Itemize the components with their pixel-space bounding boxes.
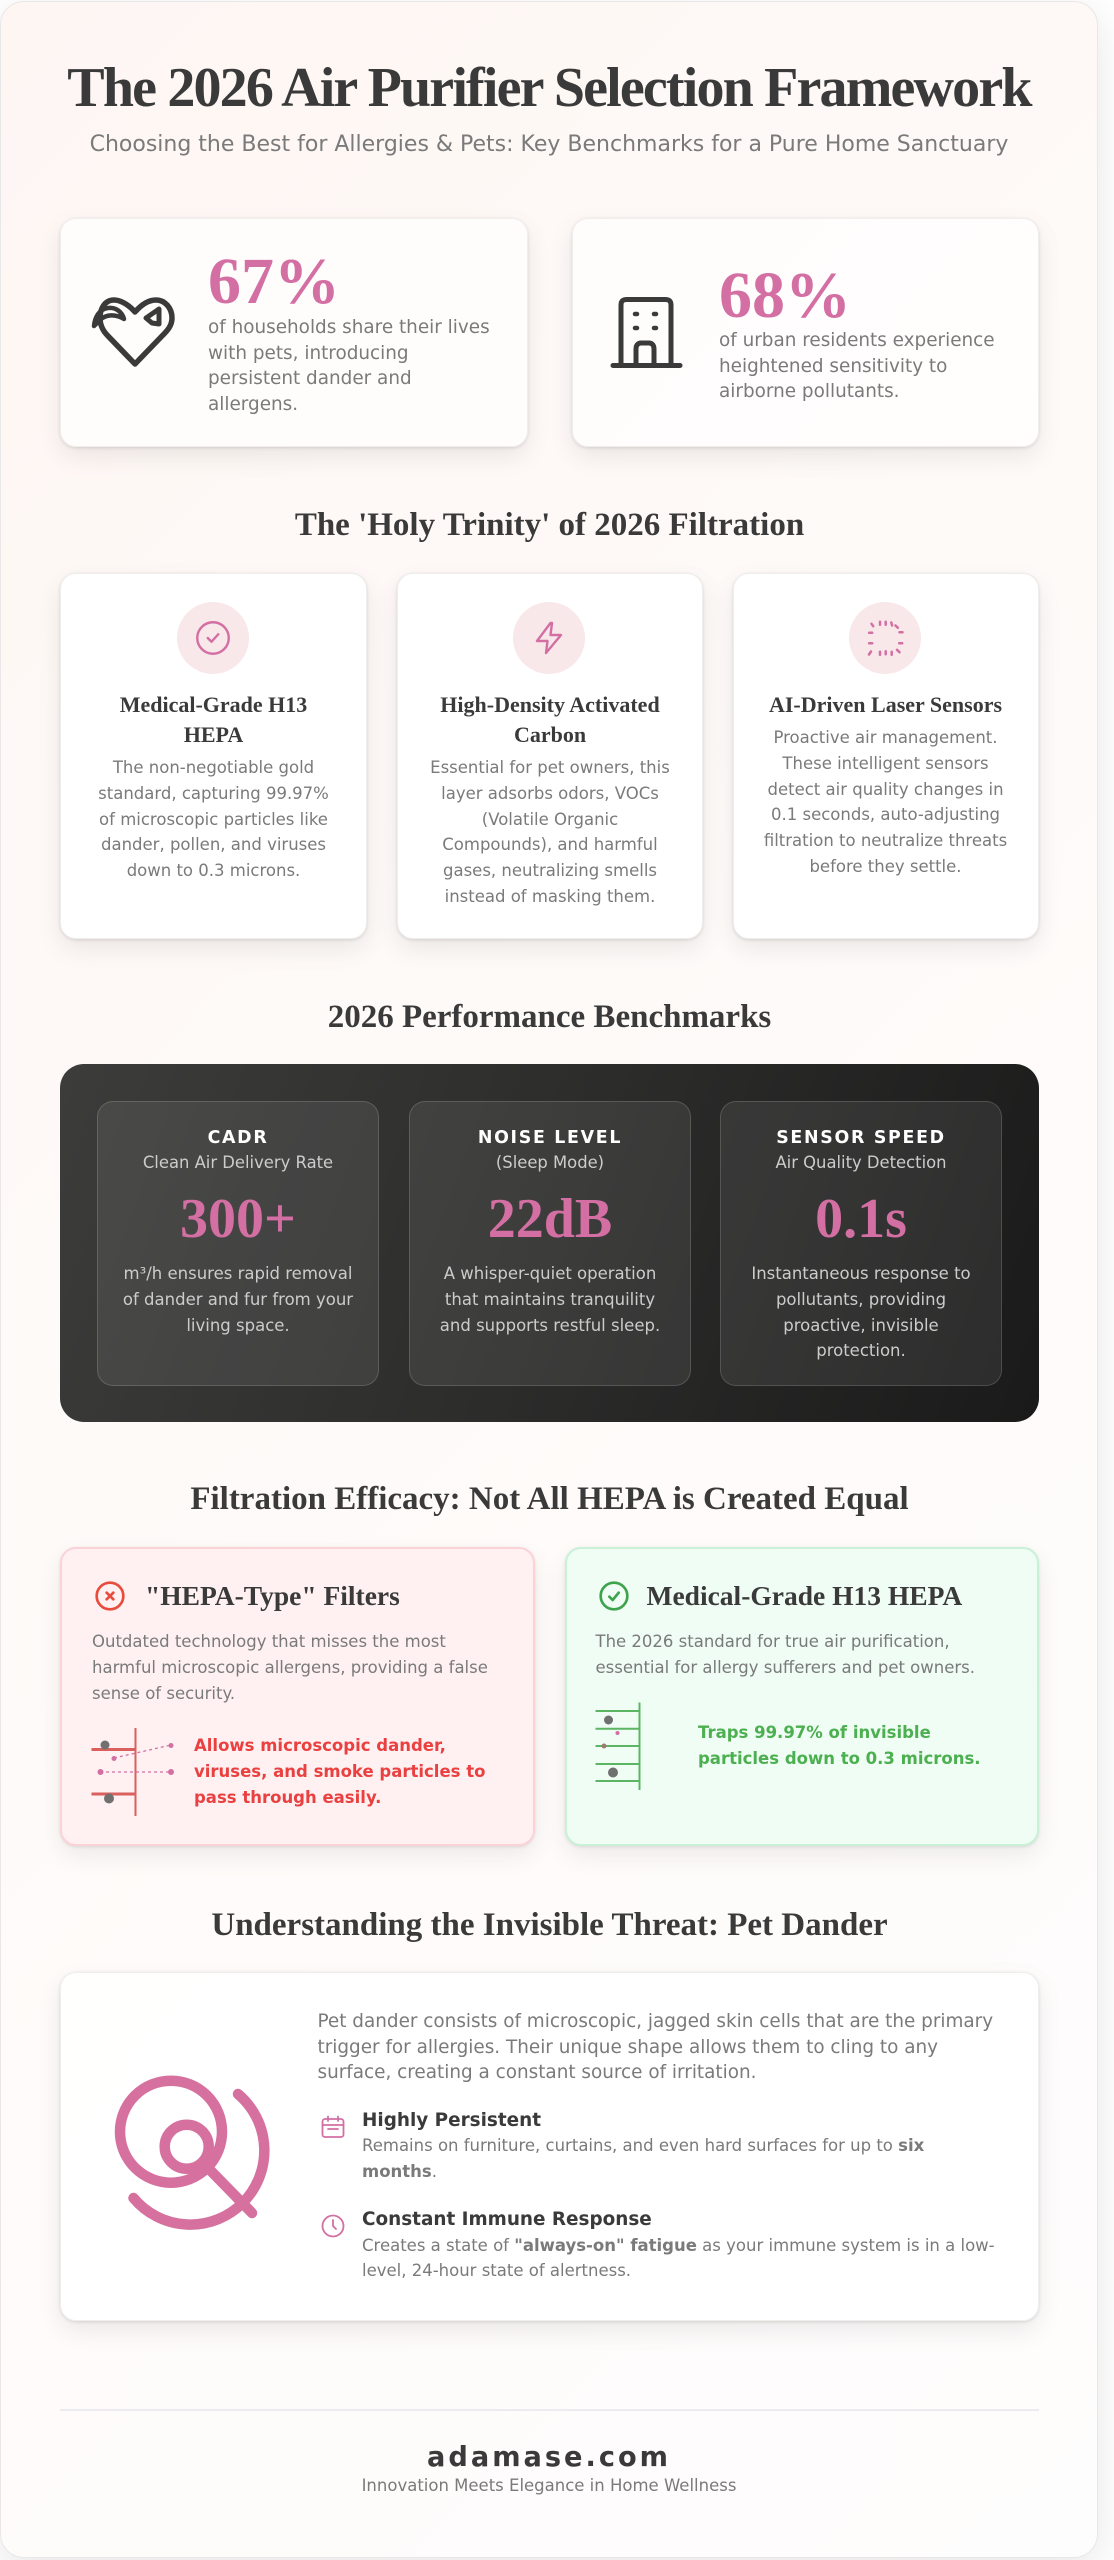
icon: check badge [177,602,249,674]
footer brand: adamase.com [427,2442,671,2473]
description: protection. [816,1341,906,1360]
icon: clock [322,2214,344,2238]
description: that maintains tranquility [445,1290,655,1309]
card title: HEPA [184,722,243,746]
stat: 68%: 68% [719,259,851,332]
stat description: of households share their lives [208,317,490,338]
intro text: trigger for allergies. Their unique shape allows them to cling to any [318,2037,938,2058]
card text: instead of masking them. [445,887,655,906]
description [751,1264,971,1360]
value: 300+ [180,1188,296,1250]
diagram: particles trapped [596,1702,640,1790]
label: SENSOR SPEED [776,1128,946,1148]
callout: allows particles [194,1736,485,1807]
callout: traps particles [698,1723,981,1768]
stat description: of urban residents experience [719,330,995,351]
callout: allows particles: viruses, and smoke particles to [194,1762,485,1781]
panel: AI laser sensors [733,573,1039,939]
card text: essential for allergy sufferers and pet owners. [596,1658,975,1677]
feature text: level, 24-hour state of alertness. [362,2261,631,2280]
card text: The 2026 standard for true air purification, [596,1632,950,1651]
description: m³/h ensures rapid removal [124,1264,352,1283]
value: 22dB [488,1188,612,1250]
description: of dander and fur from your [123,1290,353,1309]
description [123,1264,353,1335]
card text: gases, neutralizing smells [443,861,657,880]
card text: The non-negotiable gold [113,758,314,777]
stat description: airborne pollutants. [719,381,900,402]
card title: Medical-Grade H13 HEPA [646,1580,962,1611]
panel: stat households with pets [60,218,528,447]
footer tagline: Innovation Meets Elegance in Home Wellness [362,2476,736,2495]
feature text [362,2136,924,2181]
icon: lightning [513,602,585,674]
icon: building [610,297,682,368]
card text: 0.1 seconds, auto-adjusting [771,805,1000,824]
icon: x circle [95,1581,125,1611]
sublabel: (Sleep Mode) [496,1153,604,1172]
feature text [362,2236,995,2280]
sublabel: Clean Air Delivery Rate [143,1153,333,1172]
title: The 2026 Air Purifier Selection Framework [67,57,1031,119]
benchmark: CADR [97,1101,379,1386]
card text: before they settle. [809,857,962,876]
card title: Carbon [514,722,586,746]
icon: check circle [599,1581,629,1611]
value: 0.1s [815,1188,907,1250]
card text: filtration to neutralize threats [764,831,1007,850]
heading: filtration efficacy: Filtration Efficacy: Not All HEPA is Created Equal [190,1481,909,1517]
feature title: Highly Persistent [362,2110,541,2131]
label: NOISE LEVEL [478,1128,622,1148]
card text [764,728,1007,876]
intro text [318,2011,993,2083]
description: living space. [186,1316,290,1335]
icon: pet heart [92,297,175,367]
stat description: with pets, introducing [208,343,409,364]
icon: calendar [322,2116,344,2138]
heading: pet dander: Understanding the Invisible Threat: Pet Dander [211,1907,888,1943]
callout: traps particles: Traps 99.97% of invisible [698,1723,931,1742]
description: Instantaneous response to [751,1264,971,1283]
footer divider [60,2409,1039,2411]
intro text: surface, creating a constant source of irritation. [318,2062,756,2083]
card text [595,1632,975,1677]
label: CADR [208,1128,268,1148]
panel: HEPA-type [60,1547,534,1846]
description [440,1264,660,1335]
card text [98,758,329,880]
card text: harmful microscopic allergens, providing a false [92,1658,488,1677]
description: pollutants, providing [776,1290,946,1309]
benchmark: noise level [409,1101,691,1386]
card text: Essential for pet owners, this [430,758,670,777]
stat: 67%: 67% [208,245,340,318]
callout: allows particles: pass through easily. [194,1788,381,1807]
heading: benchmarks: 2026 Performance Benchmarks [328,999,771,1035]
description: proactive, invisible [783,1316,939,1335]
intro text: Pet dander consists of microscopic, jagged skin cells that are the primary [318,2011,993,2032]
callout: allows particles: Allows microscopic dander, [194,1736,446,1755]
card text: Compounds), and harmful [442,835,658,854]
panel: medical-grade H13 [565,1547,1039,1846]
panel: H13 HEPA [60,573,366,939]
card text: down to 0.3 microns. [127,861,300,880]
card text: dander, pollen, and viruses [101,835,326,854]
card text: These intelligent sensors [782,754,989,773]
stat description: heightened sensitivity to [719,356,947,377]
feature title: Constant Immune Response [362,2209,652,2230]
card text [430,758,670,906]
card text [92,1632,488,1703]
benchmark: sensor speed [720,1101,1002,1386]
callout: traps particles: particles down to 0.3 microns. [698,1749,981,1768]
subtitle: Choosing the Best for Allergies & Pets: Key Benchmarks for a Pure Home Sanctuary [90,132,1008,157]
icon: sensor ring [849,602,921,674]
description: and supports restful sleep. [440,1316,660,1335]
card text: detect air quality changes in [767,780,1004,799]
panel: stat urban residents [572,218,1039,447]
heading: holy trinity: The 'Holy Trinity' of 2026 Filtration [295,507,804,543]
card title: High-Density Activated [440,692,660,717]
stat description [719,330,995,402]
card title: Medical-Grade H13 [120,692,307,717]
card title: "HEPA-Type" Filters [145,1580,400,1611]
card title: AI-Driven Laser Sensors [769,692,1002,717]
card text: Outdated technology that misses the most [92,1632,446,1651]
card text: (Volatile Organic [482,810,618,829]
card title [440,692,660,746]
card text: layer adsorbs odors, VOCs [441,784,659,803]
description: A whisper-quiet operation [444,1264,656,1283]
panel: pet dander [60,1972,1039,2321]
feature text: Creates a state of "always-on" fatigue as your immune system is in a low- [362,2236,995,2254]
card text: of microscopic particles like [99,810,328,829]
panel: activated carbon [397,573,703,939]
sublabel: Air Quality Detection [775,1153,947,1172]
card text: sense of security. [92,1684,235,1703]
stat description [208,317,490,415]
feature text: months. [362,2162,437,2181]
card text: standard, capturing 99.97% [98,784,329,803]
card title [120,692,307,746]
diagram: particles passing through [92,1728,174,1816]
stat description: persistent dander and [208,368,412,389]
stat description: allergens. [208,394,298,415]
feature text: Remains on furniture, curtains, and even hard surfaces for up to six [362,2136,924,2155]
panel: benchmarks dark [60,1064,1039,1422]
card text: Proactive air management. [773,728,998,747]
